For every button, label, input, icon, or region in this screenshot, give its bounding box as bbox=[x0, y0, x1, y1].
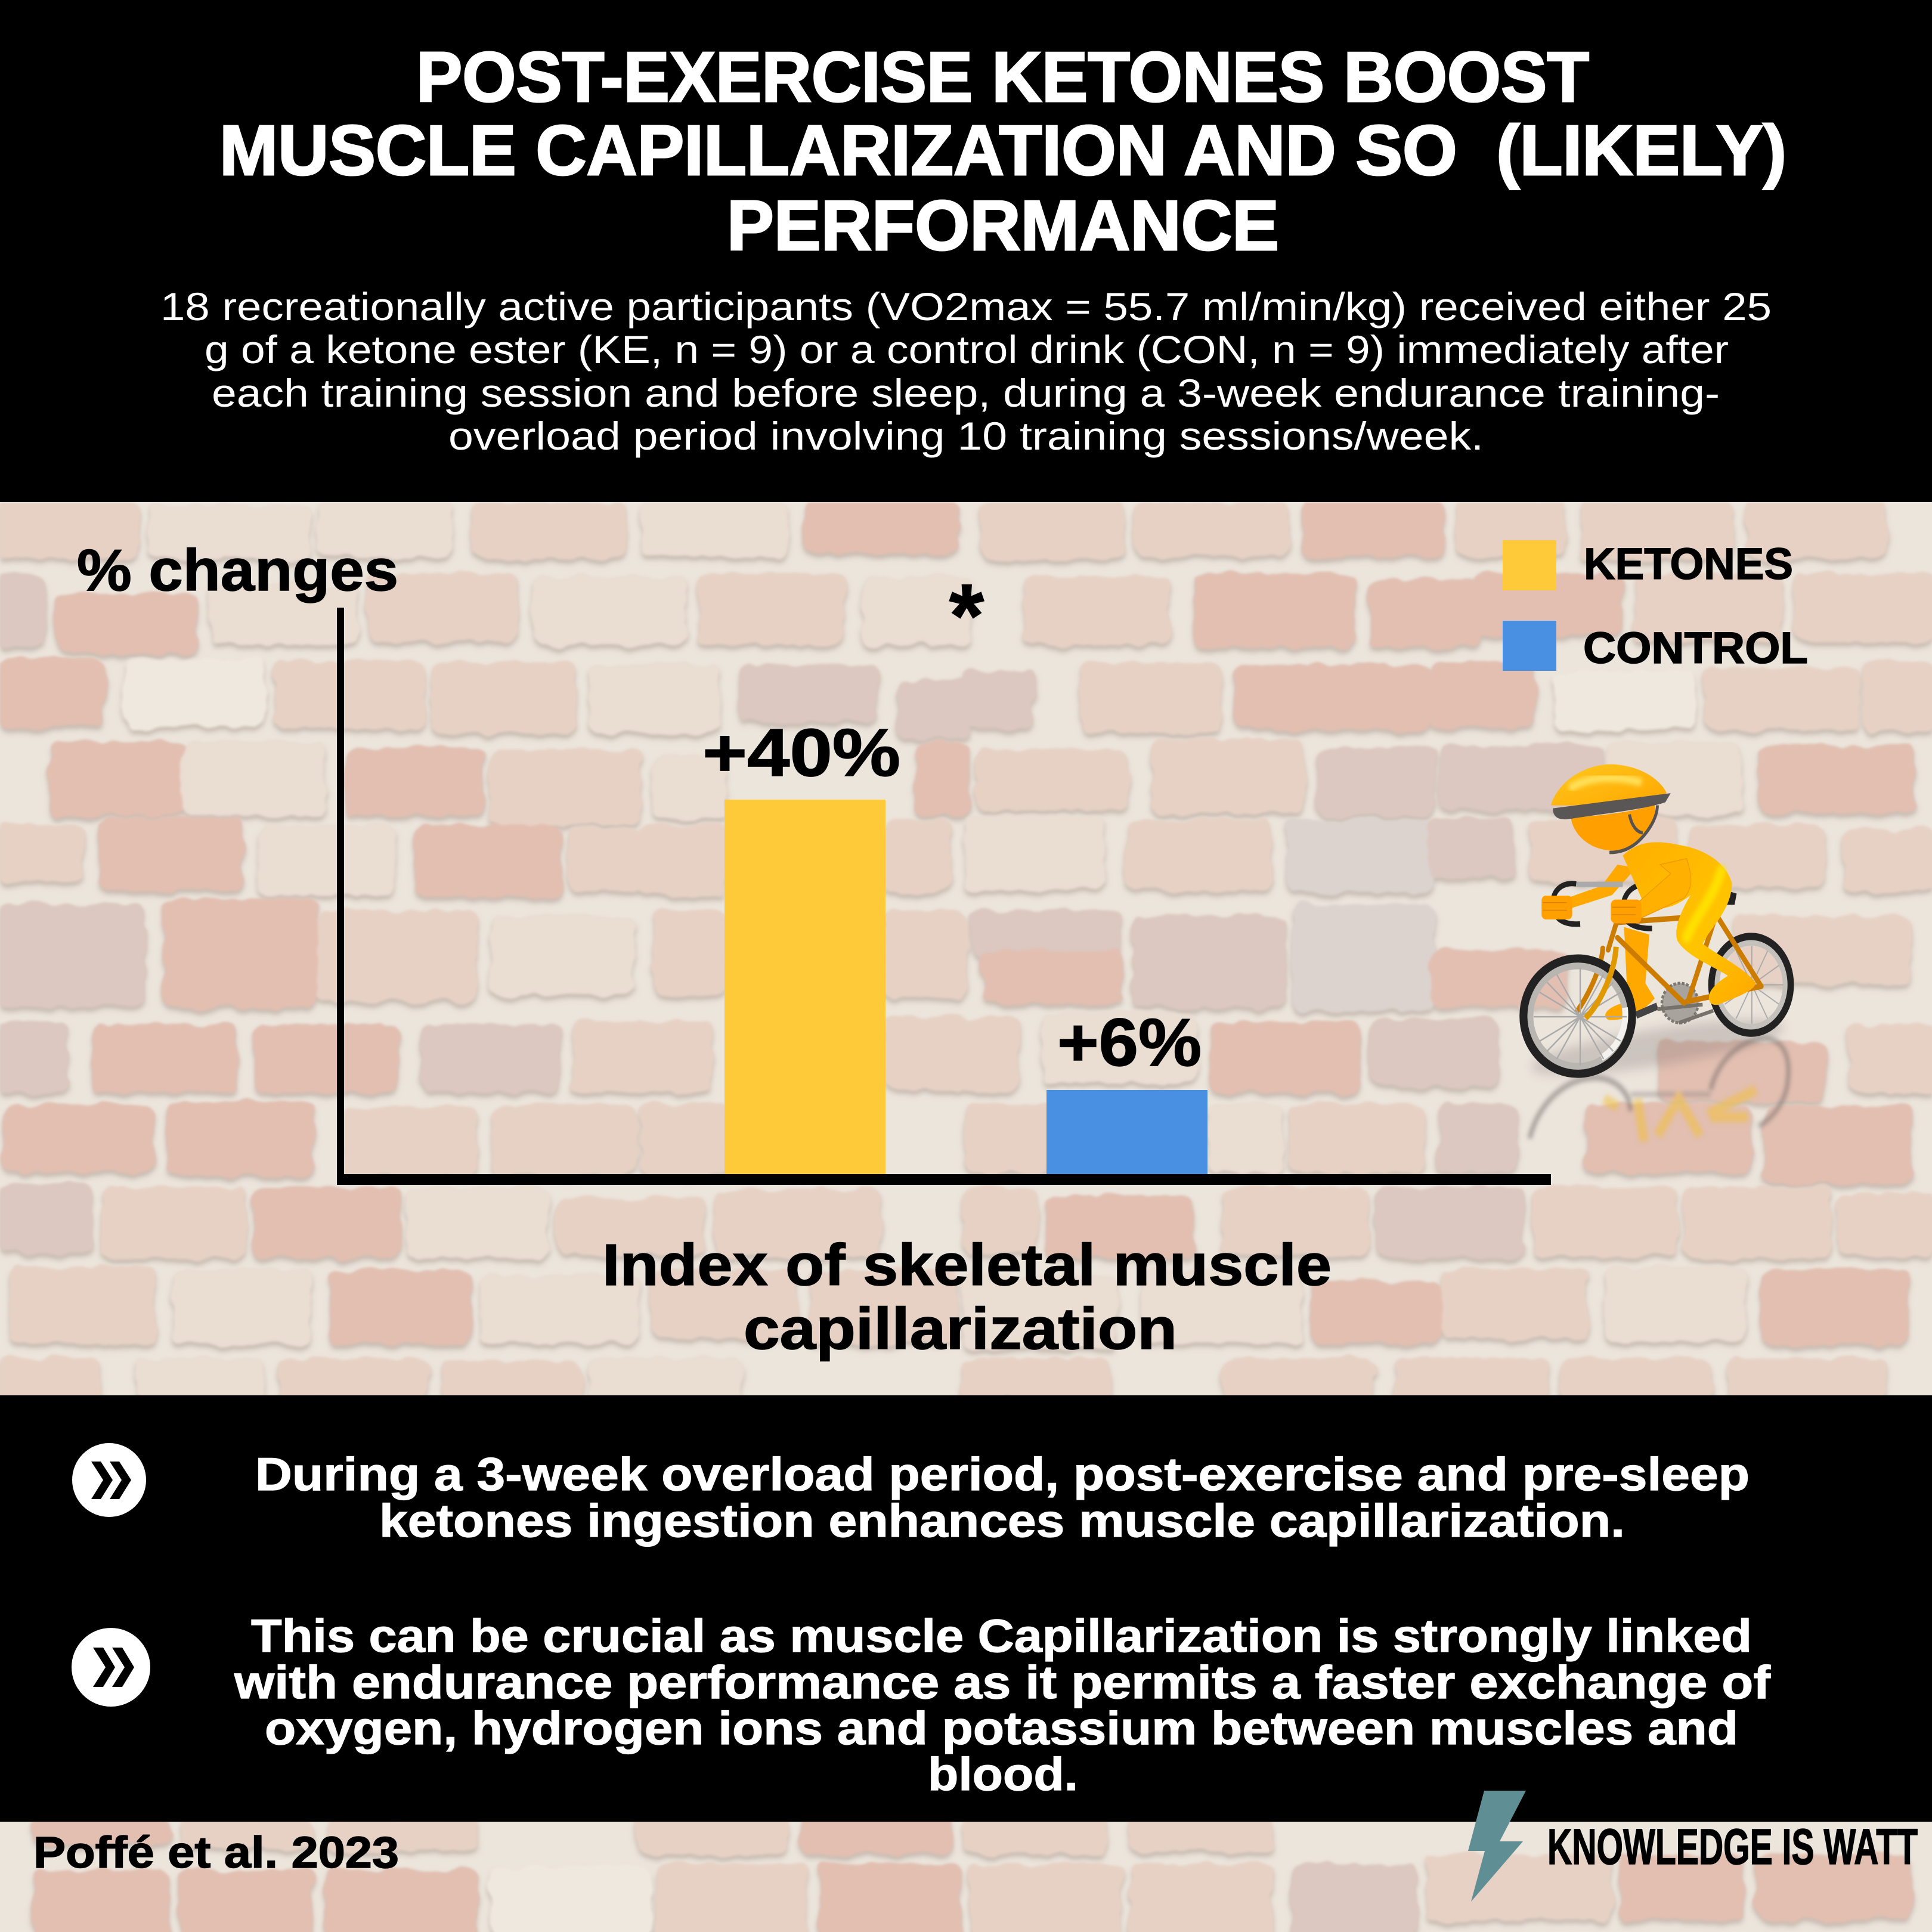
value: +40%: +40% bbox=[702, 715, 900, 790]
takeaway text 1 bbox=[255, 1448, 1750, 1547]
icon: yellow cyclist on a bike bbox=[1524, 764, 1791, 1141]
significance asterisk: * bbox=[949, 565, 984, 665]
takeaway text 2: oxygen, hydrogen ions and potassium between muscles and bbox=[265, 1702, 1738, 1754]
panel: brick wall background bbox=[0, 502, 1932, 1932]
value: +6%: +6% bbox=[1057, 1005, 1202, 1080]
icon: lightning bolt bbox=[1468, 1791, 1526, 1902]
bar chart bbox=[337, 565, 1551, 1185]
panel: black takeaways band bbox=[0, 1395, 1932, 1822]
panel: black header band bbox=[0, 0, 1932, 502]
study description: each training session and before sleep, during a 3-week endurance training- bbox=[212, 371, 1720, 415]
title: MUSCLE CAPILLARIZATION AND SO (LIKELY) bbox=[219, 111, 1787, 190]
title: PERFORMANCE bbox=[727, 186, 1279, 265]
citation: Poffé et al. 2023 bbox=[33, 1828, 399, 1877]
takeaway text 2 bbox=[234, 1609, 1771, 1800]
y-axis label: % changes bbox=[77, 537, 398, 603]
legend bbox=[1503, 539, 1808, 673]
x-axis label bbox=[602, 1232, 1332, 1361]
logo: knowledge is watt bbox=[1468, 1791, 1918, 1902]
takeaway 1 bbox=[72, 1443, 1750, 1547]
axes bbox=[337, 608, 1551, 1185]
takeaway 2 bbox=[72, 1609, 1771, 1800]
takeaway text 1: During a 3-week overload period, post-exercise and pre-sleep bbox=[255, 1448, 1750, 1500]
takeaway text 2: with endurance performance as it permits a faster exchange of bbox=[234, 1656, 1771, 1708]
legend: ketones: KETONES bbox=[1584, 539, 1793, 589]
icon: double chevron bullet bbox=[72, 1628, 150, 1707]
title bbox=[219, 38, 1787, 265]
takeaway text 2: This can be crucial as muscle Capillarization is strongly linked bbox=[251, 1609, 1752, 1662]
legend: ketones bbox=[1503, 539, 1793, 590]
study description bbox=[160, 284, 1772, 458]
x-axis label: capillarization bbox=[744, 1296, 1177, 1361]
title: POST-EXERCISE KETONES BOOST bbox=[416, 38, 1589, 117]
icon: double chevron bullet bbox=[72, 1443, 146, 1517]
legend: control: CONTROL bbox=[1583, 623, 1808, 673]
study description: 18 recreationally active participants (VO2max = 55.7 ml/min/kg) received either 25 bbox=[160, 284, 1772, 329]
study description: overload period involving 10 training sessions/week. bbox=[448, 414, 1484, 458]
legend: control bbox=[1503, 621, 1808, 673]
takeaway text 1: ketones ingestion enhances muscle capillarization. bbox=[379, 1494, 1625, 1547]
bar: ketones bbox=[724, 800, 886, 1175]
bar: control bbox=[1046, 1090, 1208, 1175]
takeaway text 2: blood. bbox=[928, 1748, 1078, 1800]
x-axis label: Index of skeletal muscle bbox=[602, 1232, 1332, 1298]
study description: g of a ketone ester (KE, n = 9) or a control drink (CON, n = 9) immediately after bbox=[205, 327, 1729, 371]
